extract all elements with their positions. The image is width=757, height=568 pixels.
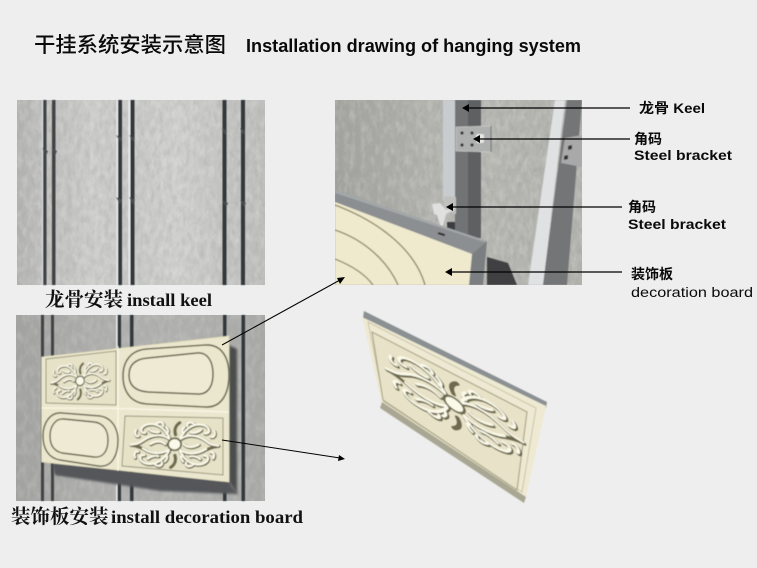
keel rails behind boards <box>41 315 245 501</box>
first keel <box>443 100 455 200</box>
board top rail <box>335 190 487 254</box>
board shadow <box>53 345 237 494</box>
label: lower steel bracket: 角码 <box>628 199 656 215</box>
caption: install keel: install keel <box>127 290 212 310</box>
arrow: board to single board rendering <box>222 440 345 461</box>
board relief curves <box>335 205 425 285</box>
shadow behind board <box>487 257 517 285</box>
steel bracket top <box>456 126 491 152</box>
bracket on second keel <box>561 135 582 167</box>
board side <box>469 241 487 285</box>
board: small pill bottom left <box>43 413 118 466</box>
label: keel <box>462 100 705 116</box>
label: upper steel bracket: Steel bracket <box>634 147 732 163</box>
caption: install decoration board: 装饰板安装 <box>11 506 109 528</box>
title: Installation drawing of hanging system <box>246 36 581 56</box>
label: keel: 龙骨 Keel <box>639 100 705 116</box>
ornament carving <box>382 343 528 468</box>
title <box>34 34 581 57</box>
caption: install keel: 龙骨安装 <box>45 289 123 311</box>
arrow: to keel <box>462 104 630 112</box>
keel rails <box>42 100 246 285</box>
board face <box>335 202 472 285</box>
board: framed ornament top left <box>46 351 116 405</box>
label: lower steel bracket: Steel bracket <box>628 216 726 232</box>
panel: keel installation photo <box>17 100 265 285</box>
board: large pill top right <box>123 345 229 407</box>
second keel <box>528 100 565 285</box>
arrow: to lower bracket <box>446 203 622 211</box>
label: lower steel bracket <box>446 199 726 232</box>
caption: install keel <box>45 289 212 311</box>
title: 干挂系统安装示意图 <box>34 34 226 57</box>
label: decoration board: 装饰板 <box>631 266 673 282</box>
label: upper steel bracket: 角码 <box>634 131 662 147</box>
lower clip bracket <box>444 196 456 214</box>
board: framed ornament bottom right <box>122 416 223 475</box>
arrow: to decoration board <box>445 268 622 276</box>
arrow: to upper bracket <box>473 135 630 143</box>
caption: install decoration board <box>11 506 303 528</box>
arrow: boards to close-up <box>222 277 345 345</box>
boards <box>42 336 229 482</box>
panel: decoration board installation photo <box>16 315 265 501</box>
label: decoration board: decoration board <box>631 284 753 300</box>
panel: close-up of keel, bracket and board <box>335 100 582 285</box>
label: upper steel bracket <box>473 131 732 163</box>
caption: install decoration board: install decoration board <box>111 507 303 527</box>
panel: single decoration board rendering <box>362 311 547 503</box>
label: decoration board <box>445 266 753 300</box>
